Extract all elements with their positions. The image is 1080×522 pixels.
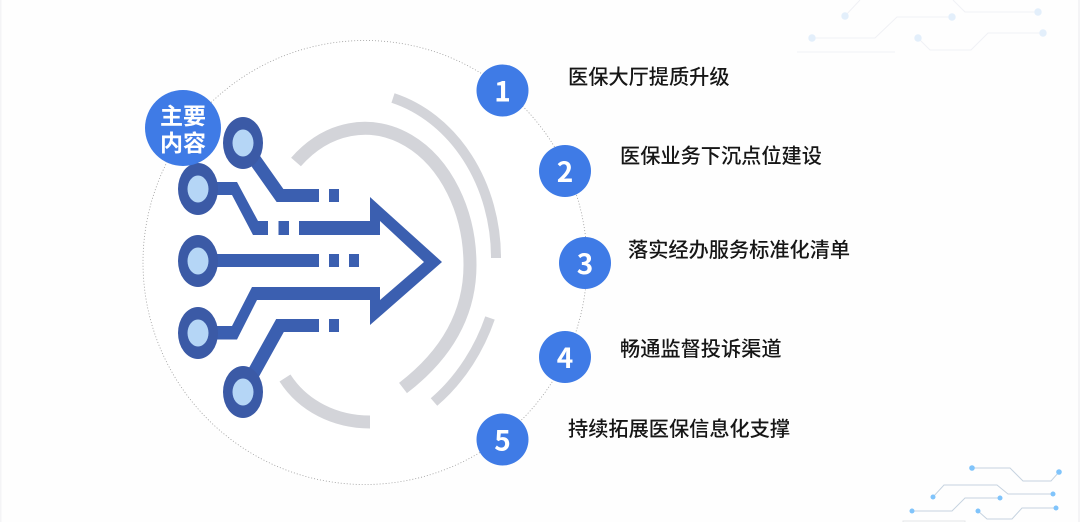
item 4: 畅通监督投诉渠道	[620, 338, 782, 361]
grey arcs around arrow	[285, 98, 496, 422]
item 1: 1	[494, 70, 511, 110]
item 2	[539, 145, 822, 197]
item 1	[476, 64, 730, 116]
arrow head with shafts	[217, 197, 442, 340]
terminal nodes	[178, 117, 263, 418]
item 5	[476, 414, 790, 466]
item 2: 2	[557, 151, 573, 191]
decoration: circuit lines bottom right	[903, 465, 1062, 522]
decoration: circuit lines top right	[797, 0, 1047, 52]
badge: main content	[145, 90, 221, 166]
item 3	[559, 237, 850, 289]
node centres	[188, 130, 254, 406]
item 3: 3	[577, 243, 593, 283]
item 1: 医保大厅提质升级	[568, 66, 730, 89]
item 3: 落实经办服务标准化清单	[628, 239, 850, 262]
dotted orbit circle	[143, 40, 587, 484]
upper branch trace	[217, 182, 268, 235]
item 5: 持续拓展医保信息化支撑	[568, 418, 790, 441]
item 5: 5	[494, 420, 511, 460]
circuit arrow icon	[178, 117, 442, 418]
badge: main content: 内容	[160, 130, 206, 156]
badge: main content: 主要	[160, 103, 206, 129]
item 4: 4	[557, 337, 573, 377]
item 4	[539, 331, 782, 383]
item 2: 医保业务下沉点位建设	[620, 145, 822, 168]
dash squares	[278, 189, 359, 332]
connector traces	[198, 143, 319, 392]
